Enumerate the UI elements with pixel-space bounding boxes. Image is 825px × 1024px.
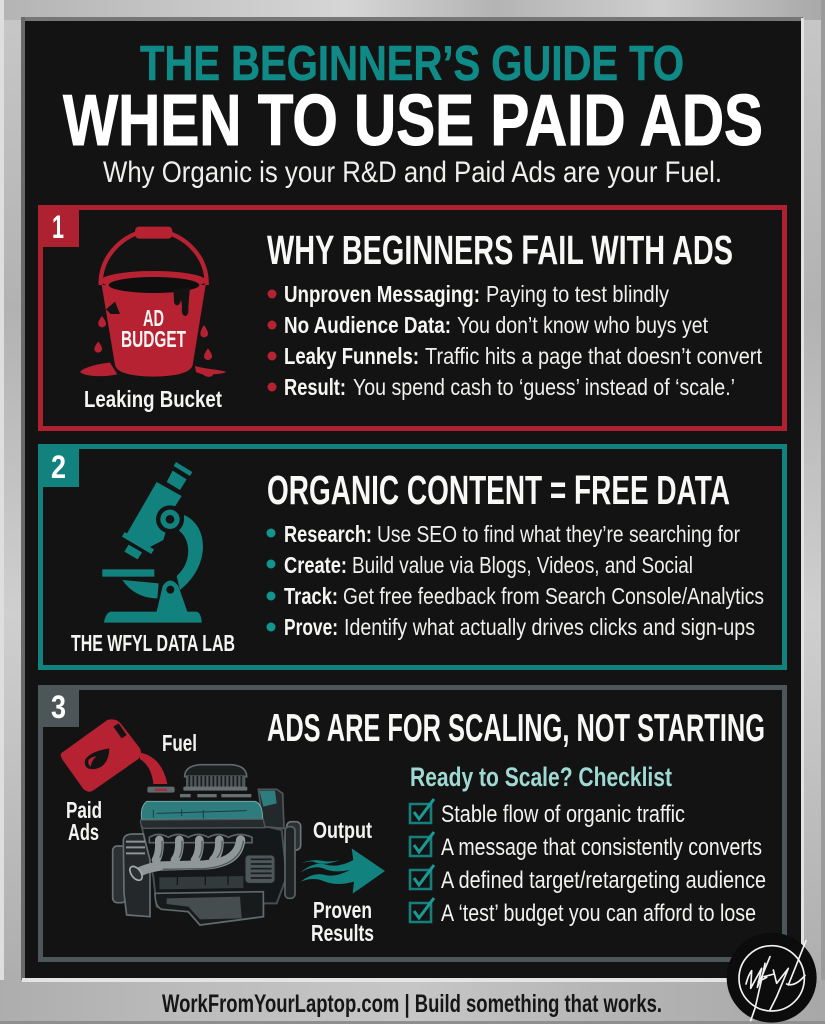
bullet list: Track: (284, 583, 338, 609)
badge 3 (38, 685, 79, 727)
bullet list: No Audience Data: (284, 312, 451, 338)
bucket label: ad budget: BUDGET (121, 326, 186, 352)
bullet list: Identify what actually drives clicks and sign-ups (344, 614, 755, 640)
label: proven results: Results (311, 920, 374, 946)
exhaust manifold (137, 840, 241, 873)
bullet list: Use SEO to find what they’re searching for (377, 521, 740, 547)
label: output: Output (313, 817, 372, 843)
badge 2: 2 (51, 449, 66, 485)
check item 1: Stable flow of organic traffic (441, 801, 685, 828)
icon: leaking bucket (80, 227, 226, 377)
rocker block right (258, 789, 284, 828)
arrow: output (299, 848, 385, 894)
bucket label: ad budget: AD (143, 305, 164, 331)
badge 1: 1 (52, 209, 64, 245)
bullet list: You spend cash to ‘guess’ instead of ‘scale.’ (353, 374, 735, 400)
badge 1 (38, 205, 79, 247)
bullet list: Prove: (284, 614, 338, 640)
checklist heading: Ready to Scale? Checklist (410, 762, 672, 792)
pulleys left (113, 846, 126, 903)
oil cap (147, 787, 175, 793)
caption: leaking bucket: Leaking Bucket (84, 386, 222, 412)
bullet list: Leaky Funnels: (284, 343, 419, 369)
bullet list: You don’t know who buys yet (457, 312, 708, 338)
checklist (410, 799, 766, 927)
logo badge (727, 933, 817, 1023)
bullet list (266, 521, 764, 640)
engine block (142, 827, 287, 925)
icon: engine (113, 765, 301, 925)
label: paid ads: Paid (66, 797, 102, 823)
panel 1: why beginners fail (38, 205, 784, 428)
badge 3: 3 (51, 689, 66, 725)
icon: microscope (102, 462, 203, 623)
label: paid ads (66, 797, 102, 845)
bullet list (268, 281, 762, 400)
title block (63, 37, 763, 189)
check item 2: A message that consistently converts (441, 834, 762, 861)
bucket label: ad budget (121, 305, 186, 352)
label: paid ads: Ads (68, 819, 99, 845)
bullet list: Paying to test blindly (486, 281, 669, 307)
icon: fuel can (61, 719, 167, 792)
oil pan (155, 892, 263, 925)
check item 4: A ‘test’ budget you can afford to lose (441, 900, 756, 927)
title line 1: THE BEGINNER’S GUIDE TO (140, 37, 684, 91)
manifold flange (149, 834, 252, 843)
panel 3: ads are for scaling (38, 685, 784, 960)
badge 2 (38, 444, 79, 487)
bullet list: Unproven Messaging: (284, 281, 480, 307)
bullet list: Build value via Blogs, Videos, and Social (352, 552, 693, 578)
air cleaner (183, 765, 247, 791)
label: proven results: Proven (313, 897, 372, 923)
bullet list: Research: (284, 521, 372, 547)
label: fuel: Fuel (162, 730, 197, 756)
caption: data lab: THE WFYL DATA LAB (71, 630, 235, 656)
check item 3: A defined target/retargeting audience (441, 867, 766, 894)
belt pulleys right (287, 822, 301, 850)
panel 2: organic content (38, 444, 784, 668)
footer text: WorkFromYourLaptop.com | Build something that works. (162, 990, 662, 1018)
subtitle: Why Organic is your R&D and Paid Ads are your Fuel. (103, 156, 722, 189)
bullet list: Traffic hits a page that doesn’t convert (425, 343, 762, 369)
label: proven results (311, 897, 374, 946)
bullet list: Result: (284, 374, 346, 400)
valve cover (141, 801, 263, 819)
bullet list: Create: (284, 552, 347, 578)
